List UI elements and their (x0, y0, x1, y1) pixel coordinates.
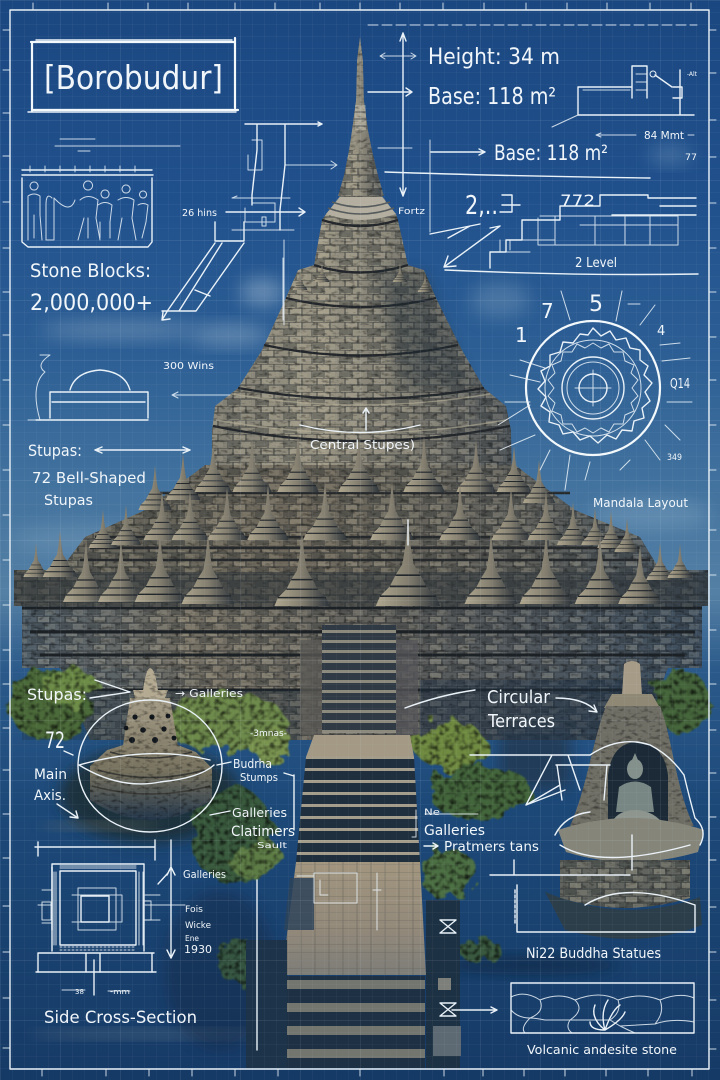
title: Borobudur (28, 38, 238, 112)
stair pillars (300, 640, 322, 735)
middle flight (296, 757, 420, 862)
upper flight (322, 625, 396, 733)
spec: height and base: Base: 118 m² (494, 141, 608, 165)
stupa row 1 (138, 436, 555, 510)
right stupa annotations: Pratmers tans (444, 839, 539, 855)
stupa row 3 (23, 519, 693, 606)
Buddha figure (609, 753, 666, 827)
right stupa annotations: Ni22 Buddha Statues (526, 946, 661, 962)
left stupa annotations: Budrha (233, 756, 272, 771)
top-right mini diagram: -Alt (687, 71, 698, 78)
title: Borobudur: [Borobudur] (44, 58, 223, 97)
andesite stone pattern panel (511, 983, 694, 1057)
lotus petals ring (538, 328, 652, 443)
floor plan annotations: Galleries (183, 869, 226, 881)
tower body (212, 196, 512, 475)
mandala layout diagram: Q14 (670, 377, 690, 392)
stat: stone blocks: 2,000,000+ (30, 291, 153, 316)
stat: stupas (28, 441, 190, 509)
left stupa annotations: 72 (45, 729, 65, 754)
spire (338, 36, 384, 196)
terrace level diagram: 2,.. (465, 191, 498, 221)
label: central stupas (300, 408, 420, 545)
left stupa annotations: Stupas: (27, 685, 87, 704)
label: central stupas: Central Stupes) (310, 438, 415, 452)
mandala layout diagram: 4 (657, 324, 665, 339)
tower collar and ledges (213, 197, 510, 441)
floor plan: side cross-section: -mm (110, 988, 130, 996)
floor plan: side cross-section: 38 (75, 988, 84, 996)
terraced base (14, 465, 708, 606)
lower terrace walls (22, 606, 702, 740)
bottom smoke and shadow bands (30, 730, 620, 1050)
top-right mini diagram: 84 Mmt (644, 129, 685, 142)
landing (306, 735, 414, 757)
stat: stone blocks (30, 260, 153, 316)
measured tower sketch (162, 122, 337, 325)
left stupa illustration (90, 668, 212, 820)
andesite stone pattern panel: Volcanic andesite stone (527, 1042, 677, 1057)
floor plan annotations: 1930 (184, 943, 212, 956)
left stupa annotations: Stumps (240, 771, 278, 784)
right side slab (433, 1026, 461, 1056)
terrace level diagram (465, 191, 696, 271)
right stupa annotations (405, 687, 703, 962)
clouds (10, 146, 710, 556)
foliage (8, 669, 710, 986)
small stupa side sketch (28, 355, 230, 420)
label: Fortz: Fortz (398, 207, 425, 217)
plaza (282, 862, 426, 975)
left stupa annotations: Sault (257, 841, 287, 850)
right stair pillar (396, 640, 418, 735)
hourglass markers and arrow (440, 920, 497, 1016)
spec: height and base: Base: 118 m² (428, 84, 556, 110)
monument: Borobudur temple (14, 36, 708, 740)
inner petals ring (548, 343, 638, 433)
left stupa annotations: Clatimers (231, 824, 295, 840)
right stupa annotations: Ne (424, 808, 441, 818)
left stupa annotations: Axis. (34, 788, 66, 804)
dimension lines around spire (368, 25, 698, 274)
terrace level diagram: 772 (560, 191, 595, 210)
central staircase (246, 625, 461, 1068)
small stupas on the tower (293, 262, 432, 292)
right stupa annotations: Terraces (487, 711, 555, 732)
floor plan: side cross-section: Side Cross-Section (44, 1008, 197, 1027)
floor plan annotations: Wicke (185, 921, 211, 931)
relief panel with figures (22, 139, 180, 247)
floor plan annotations: Ene (185, 934, 199, 943)
right side ramp (426, 900, 460, 1068)
floor plan: side cross-section (35, 840, 197, 1027)
plaza shadow (284, 878, 314, 930)
stat: stupas: Stupas: (28, 441, 82, 460)
left side ramp (246, 940, 287, 1068)
small stupa side sketch: 300 Wins (163, 361, 214, 372)
left stupa annotations: → Galleries (175, 687, 243, 700)
mandala layout diagram: 1 (515, 323, 528, 347)
left stupa annotations: Main (34, 767, 67, 783)
mandala layout diagram (498, 291, 692, 510)
mandala layout diagram: Mandala Layout (593, 495, 688, 510)
plaza annotation marks (297, 873, 381, 930)
carved people (28, 181, 148, 240)
radiating annotations (498, 291, 692, 490)
top-right mini diagram: 77 (685, 153, 697, 163)
stat: stupas: 72 Bell-Shaped (32, 469, 146, 487)
right stupa annotations: Circular (487, 687, 551, 708)
right Buddha stupa illustration (545, 661, 704, 939)
mandala layout diagram: 7 (541, 299, 554, 323)
stupa row 2 (89, 481, 640, 552)
right stupa annotations: Galleries (424, 823, 485, 839)
top-right mini diagram (552, 66, 698, 163)
stat: stupas: Stupas (44, 493, 93, 509)
stat: stone blocks: Stone Blocks: (30, 260, 151, 282)
bottom flight (287, 976, 425, 1068)
left stupa annotations: -3mnas- (250, 729, 287, 739)
terrace shadow lines (14, 493, 708, 606)
floor plan annotations: Fois (185, 905, 203, 915)
measured tower sketch: 26 hins (182, 208, 217, 219)
spec: height and base: Height: 34 m (428, 45, 560, 70)
spec: height and base (428, 45, 608, 165)
left stupa annotations (27, 680, 295, 850)
mandala layout diagram: 5 (589, 292, 603, 317)
mandala layout diagram: 349 (667, 453, 682, 463)
plaza paving (282, 862, 426, 975)
floor plan annotations (158, 869, 257, 1050)
terrace level diagram: 2 Level (575, 256, 617, 271)
left stupa annotations: Galleries (232, 805, 287, 820)
wall shadow lines (22, 608, 702, 740)
right side block (438, 978, 451, 990)
